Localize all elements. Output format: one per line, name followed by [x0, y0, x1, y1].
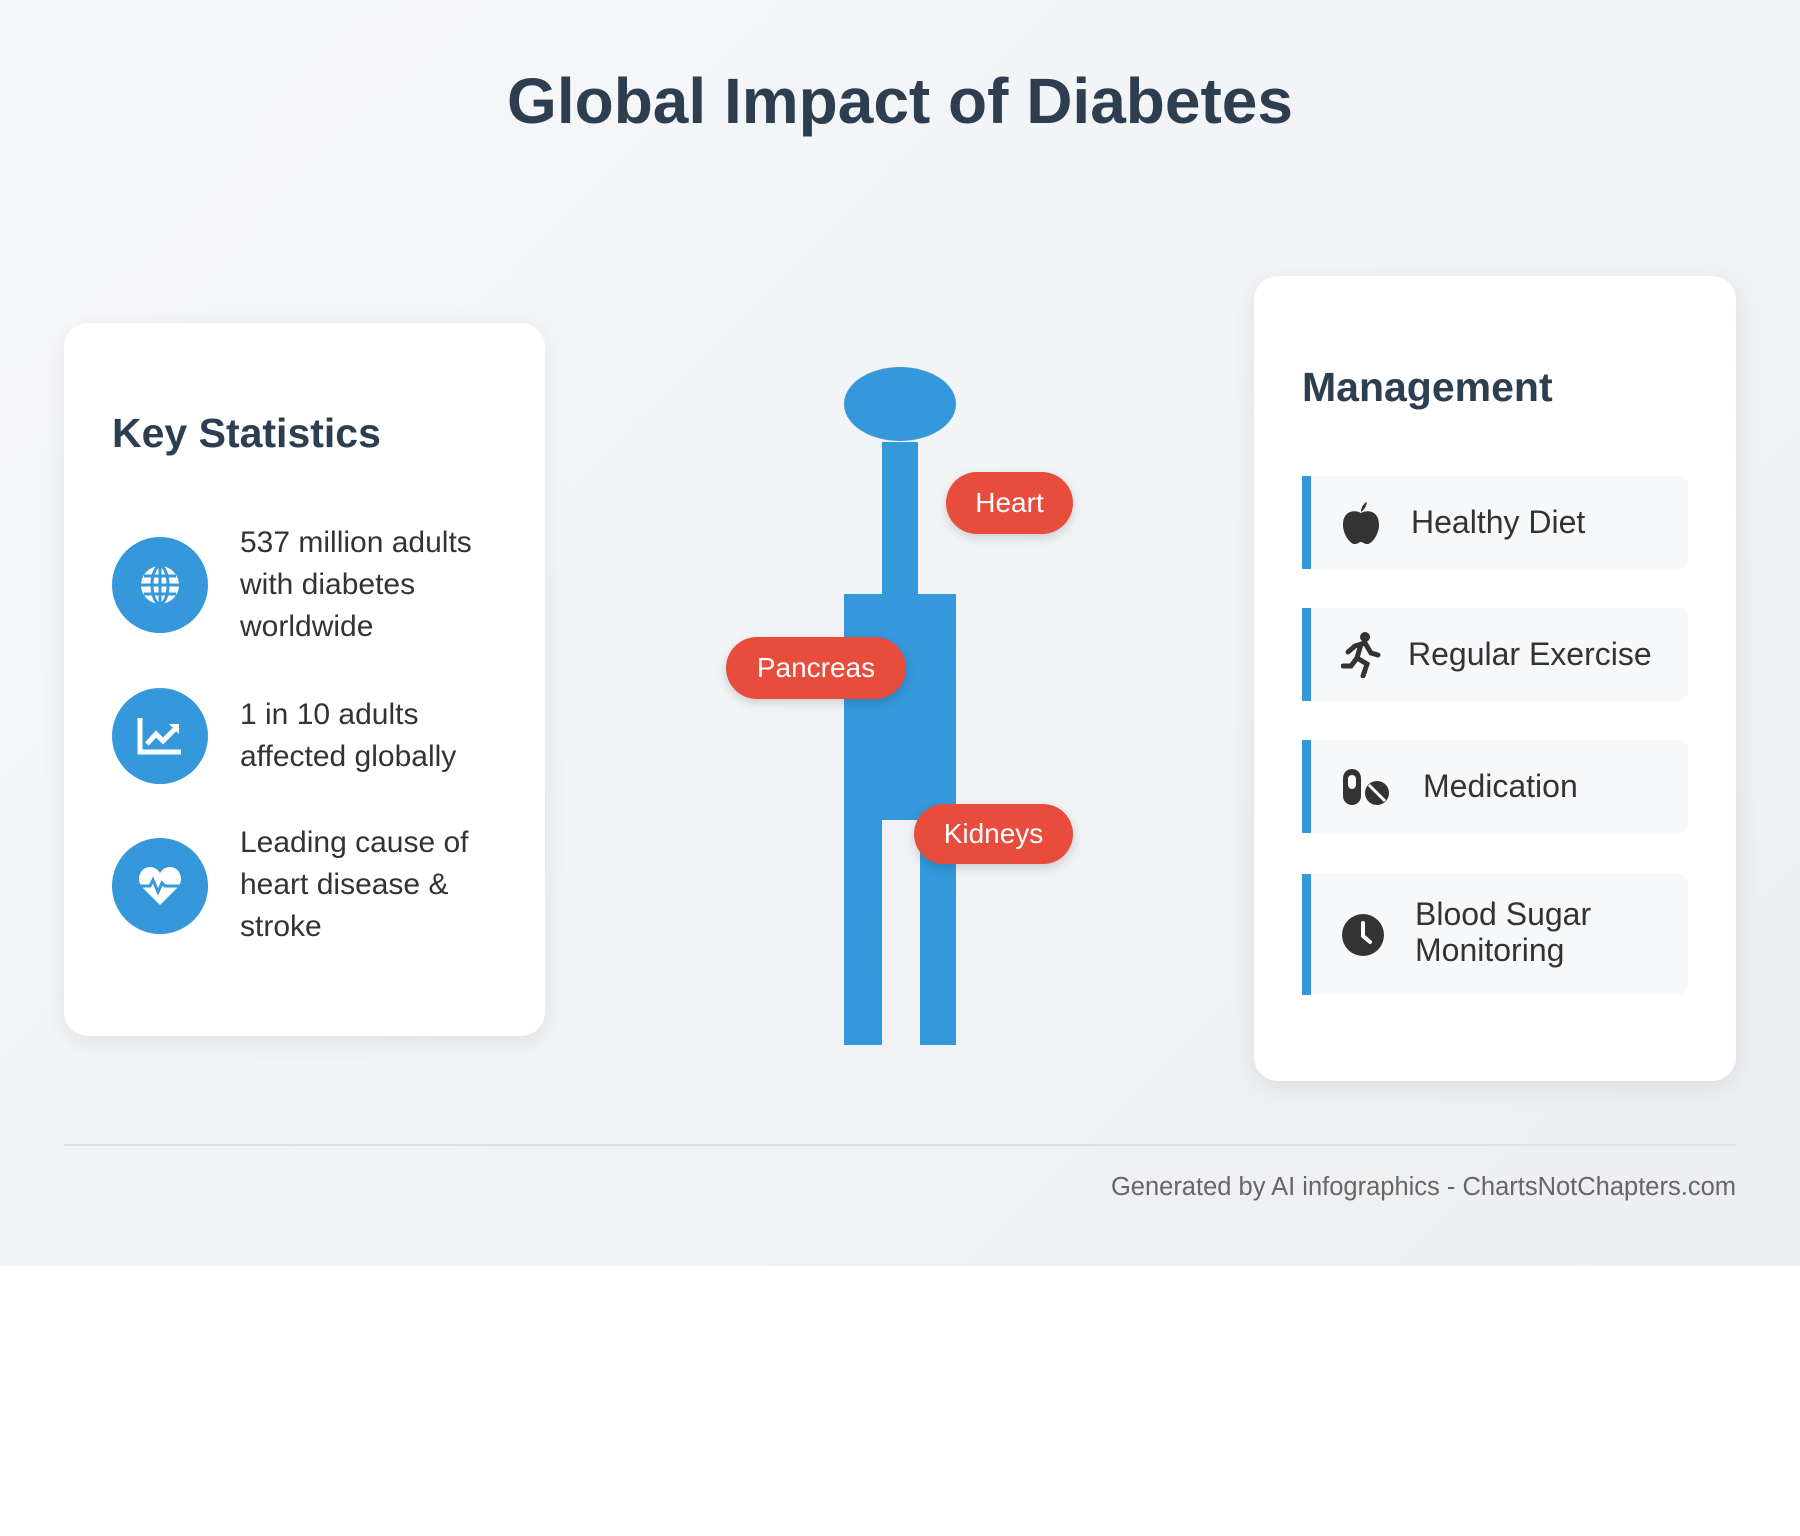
item: medication: Medication: [1423, 768, 1578, 804]
stat 1 text: [240, 526, 472, 643]
icon: chart: [112, 688, 208, 784]
stat 3 text: Leading cause of: [240, 826, 469, 859]
human figure: [844, 367, 956, 1045]
label: kidneys: Kidneys: [944, 818, 1043, 849]
stat 1 text: 537 million adults: [240, 526, 472, 559]
title: Global Impact of Diabetes: [507, 65, 1293, 137]
label: pancreas: Pancreas: [757, 652, 875, 683]
item: blood sugar monitoring: Blood Sugar: [1415, 896, 1591, 932]
stat 3 text: [240, 826, 469, 943]
stat 1 text: with diabetes: [240, 568, 415, 601]
stat 3 text: stroke: [240, 910, 322, 943]
item: blood sugar monitoring: Monitoring: [1415, 932, 1564, 968]
footer: Generated by AI infographics - ChartsNotChapters.com: [1111, 1173, 1736, 1201]
panel: management: [1254, 276, 1736, 1081]
stat 3 text: heart disease &: [240, 868, 448, 901]
item: healthy diet: Healthy Diet: [1411, 504, 1585, 540]
stat 1 text: worldwide: [240, 610, 373, 643]
stat 2 text: affected globally: [240, 740, 456, 773]
heading: key statistics: Key Statistics: [112, 410, 381, 456]
heading: management: Management: [1302, 364, 1553, 410]
stat 2 text: [240, 698, 456, 773]
item: regular exercise: [1302, 608, 1688, 701]
icon: heartbeat: [112, 838, 208, 934]
item: blood sugar monitoring: [1302, 874, 1688, 995]
label: pancreas: [726, 637, 906, 699]
item: regular exercise: Regular Exercise: [1408, 636, 1652, 672]
divider: [64, 1144, 1736, 1146]
panel: key statistics: [64, 323, 545, 1036]
label: heart: [946, 472, 1073, 534]
stat 2 text: 1 in 10 adults: [240, 698, 418, 731]
item: medication: [1302, 740, 1688, 833]
icon: globe: [112, 537, 208, 633]
item: healthy diet: [1302, 476, 1688, 569]
label: heart: Heart: [975, 487, 1044, 518]
label: kidneys: [914, 804, 1073, 864]
